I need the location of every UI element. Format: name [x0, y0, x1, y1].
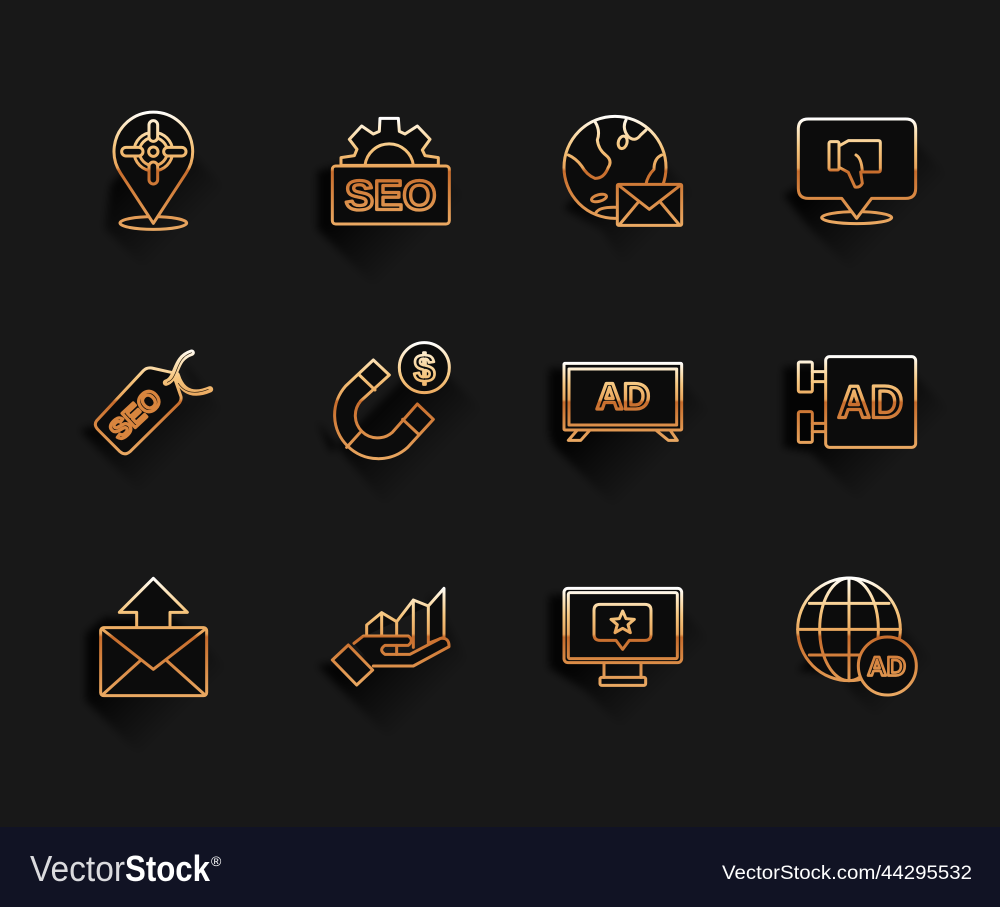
AD lettering: AD — [596, 375, 650, 417]
long shadow of magnet — [317, 355, 490, 516]
dollar coin — [399, 343, 449, 393]
open hand — [354, 636, 449, 666]
tag outline — [95, 368, 181, 454]
magnet dividers — [347, 375, 418, 447]
monitor screen — [568, 593, 677, 659]
long shadow of TV — [549, 368, 730, 509]
icon: SEO price tag — [80, 353, 262, 523]
envelope flap — [102, 629, 205, 694]
footer logo: VectorStock — [30, 848, 222, 889]
wrist cuff — [332, 645, 373, 685]
long shadow of tag — [80, 358, 262, 523]
icon: monitor with star speech bubble — [549, 588, 730, 754]
string — [166, 353, 210, 393]
icon: SEO settings gear sign — [317, 118, 478, 292]
long shadow of hand — [317, 593, 497, 753]
icon: hanging AD sign — [783, 357, 964, 516]
SEO lettering on tag: SEO — [103, 383, 168, 446]
globe circle — [564, 116, 666, 218]
TV frame — [564, 363, 682, 430]
icon: speech bubble with thumbs down — [783, 119, 964, 290]
monitor frame — [564, 588, 682, 663]
bubble base ellipse — [822, 212, 892, 224]
sign board — [826, 357, 916, 447]
footer logo: VectorStock: ® — [211, 853, 222, 869]
crosshair — [122, 121, 186, 184]
bubble outline — [798, 119, 916, 218]
TV stand legs — [568, 430, 677, 440]
footer bar — [0, 827, 1000, 907]
star speech bubble — [594, 604, 651, 649]
star — [611, 611, 634, 633]
AD badge lettering: AD — [867, 652, 906, 682]
long shadow of globe — [798, 598, 934, 755]
footer logo: VectorStock: Vector — [30, 848, 125, 889]
envelope — [617, 184, 682, 225]
icon: globe with envelope — [564, 116, 699, 294]
icon: wire globe with AD badge — [798, 578, 934, 755]
gear hub arc — [365, 144, 413, 165]
pin base ellipse — [120, 217, 187, 229]
long shadow of bubble — [783, 128, 964, 290]
envelope body — [101, 628, 207, 696]
growth chart — [367, 588, 444, 647]
icon: horseshoe magnet with dollar coin — [317, 343, 490, 516]
gear outline — [341, 118, 438, 165]
thumbs down hand — [829, 141, 880, 187]
icon: television showing AD — [549, 363, 730, 509]
icon: location pin with target crosshair — [105, 112, 229, 292]
long shadow of SEO sign — [317, 144, 478, 292]
long shadow of monitor — [549, 595, 730, 754]
TV screen — [569, 369, 677, 425]
AD badge — [858, 637, 916, 695]
sign board — [332, 166, 449, 224]
pin outline — [114, 112, 193, 223]
long shadow of pin — [105, 129, 229, 292]
monitor base — [600, 677, 646, 685]
finger line — [392, 645, 401, 654]
long shadow of sign — [783, 362, 964, 516]
dollar sign: $ — [414, 348, 435, 391]
icon: envelope with up arrow — [86, 578, 255, 764]
AD lettering: AD — [838, 377, 903, 428]
up arrow — [119, 578, 187, 628]
long shadow of envelope — [86, 617, 255, 764]
wall brackets — [798, 362, 826, 442]
continents — [568, 120, 662, 213]
monitor stand — [604, 663, 641, 677]
magnet body — [335, 360, 433, 459]
icon: hand holding growth chart — [317, 588, 497, 753]
SEO lettering: SEO — [345, 172, 436, 219]
wire globe — [798, 578, 900, 681]
footer logo: VectorStock: Stock — [125, 848, 211, 889]
long shadow of globe — [564, 136, 699, 294]
footer image id: VectorStock.com/44295532 — [722, 863, 972, 884]
